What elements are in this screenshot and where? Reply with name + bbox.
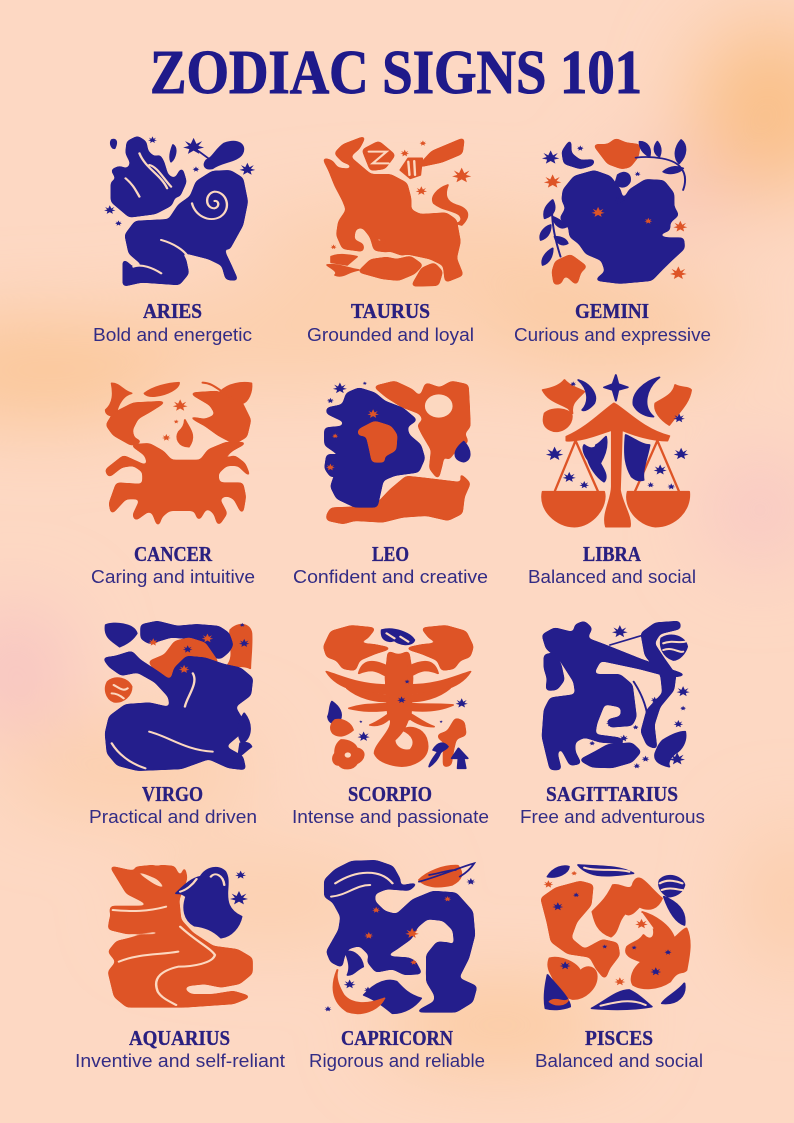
description: Bold and energetic — [93, 325, 252, 345]
icon: aries ram — [104, 136, 255, 286]
name: LEO — [372, 542, 409, 566]
name: CANCER — [134, 542, 213, 566]
panel: aries — [93, 136, 255, 345]
name: ARIES — [143, 299, 202, 323]
name: GEMINI — [575, 299, 649, 323]
description: Free and adventurous — [520, 807, 705, 827]
name: LIBRA — [583, 542, 642, 566]
icon: capricorn sea-goat — [324, 861, 476, 1013]
name: PISCES — [585, 1026, 653, 1050]
panel: leo — [293, 381, 488, 587]
icon: aquarius water bearer — [109, 866, 252, 1007]
description: Grounded and loyal — [307, 325, 474, 345]
panel: libra — [528, 375, 696, 587]
description: Rigorous and reliable — [309, 1051, 485, 1071]
icon: leo lion woman and sun — [325, 381, 470, 523]
description: Curious and expressive — [514, 325, 711, 345]
icon: gemini twins — [540, 139, 687, 284]
panel: pisces — [535, 865, 703, 1071]
icon: libra scales — [542, 375, 691, 527]
description: Inventive and self-reliant — [75, 1051, 285, 1071]
icon: virgo woman — [104, 622, 252, 770]
icon: pisces fish — [541, 865, 690, 1009]
panel: sagittarius — [520, 622, 705, 827]
name: AQUARIUS — [129, 1026, 230, 1050]
panel: capricorn — [309, 861, 485, 1071]
name: SCORPIO — [348, 782, 432, 806]
description: Balanced and social — [535, 1051, 703, 1071]
description: Practical and driven — [89, 807, 257, 827]
description: Balanced and social — [528, 567, 696, 587]
name: SAGITTARIUS — [546, 782, 678, 806]
panel: virgo — [89, 622, 257, 827]
panel: taurus — [307, 137, 474, 345]
name: CAPRICORN — [341, 1026, 453, 1050]
icon: scorpio scorpion — [324, 626, 473, 769]
panel: scorpio — [292, 626, 489, 827]
name: TAURUS — [351, 299, 430, 323]
icon: taurus bull — [323, 137, 471, 286]
panel: aquarius — [75, 866, 285, 1071]
icon: sagittarius centaur — [543, 622, 690, 769]
icon: cancer crab — [106, 383, 251, 526]
description: Intense and passionate — [292, 807, 489, 827]
panel: cancer — [91, 383, 255, 587]
name: VIRGO — [142, 782, 203, 806]
description: Caring and intuitive — [91, 567, 255, 587]
description: Confident and creative — [293, 567, 488, 587]
panel: gemini — [514, 139, 711, 345]
title: ZODIAC SIGNS 101 — [150, 39, 642, 107]
